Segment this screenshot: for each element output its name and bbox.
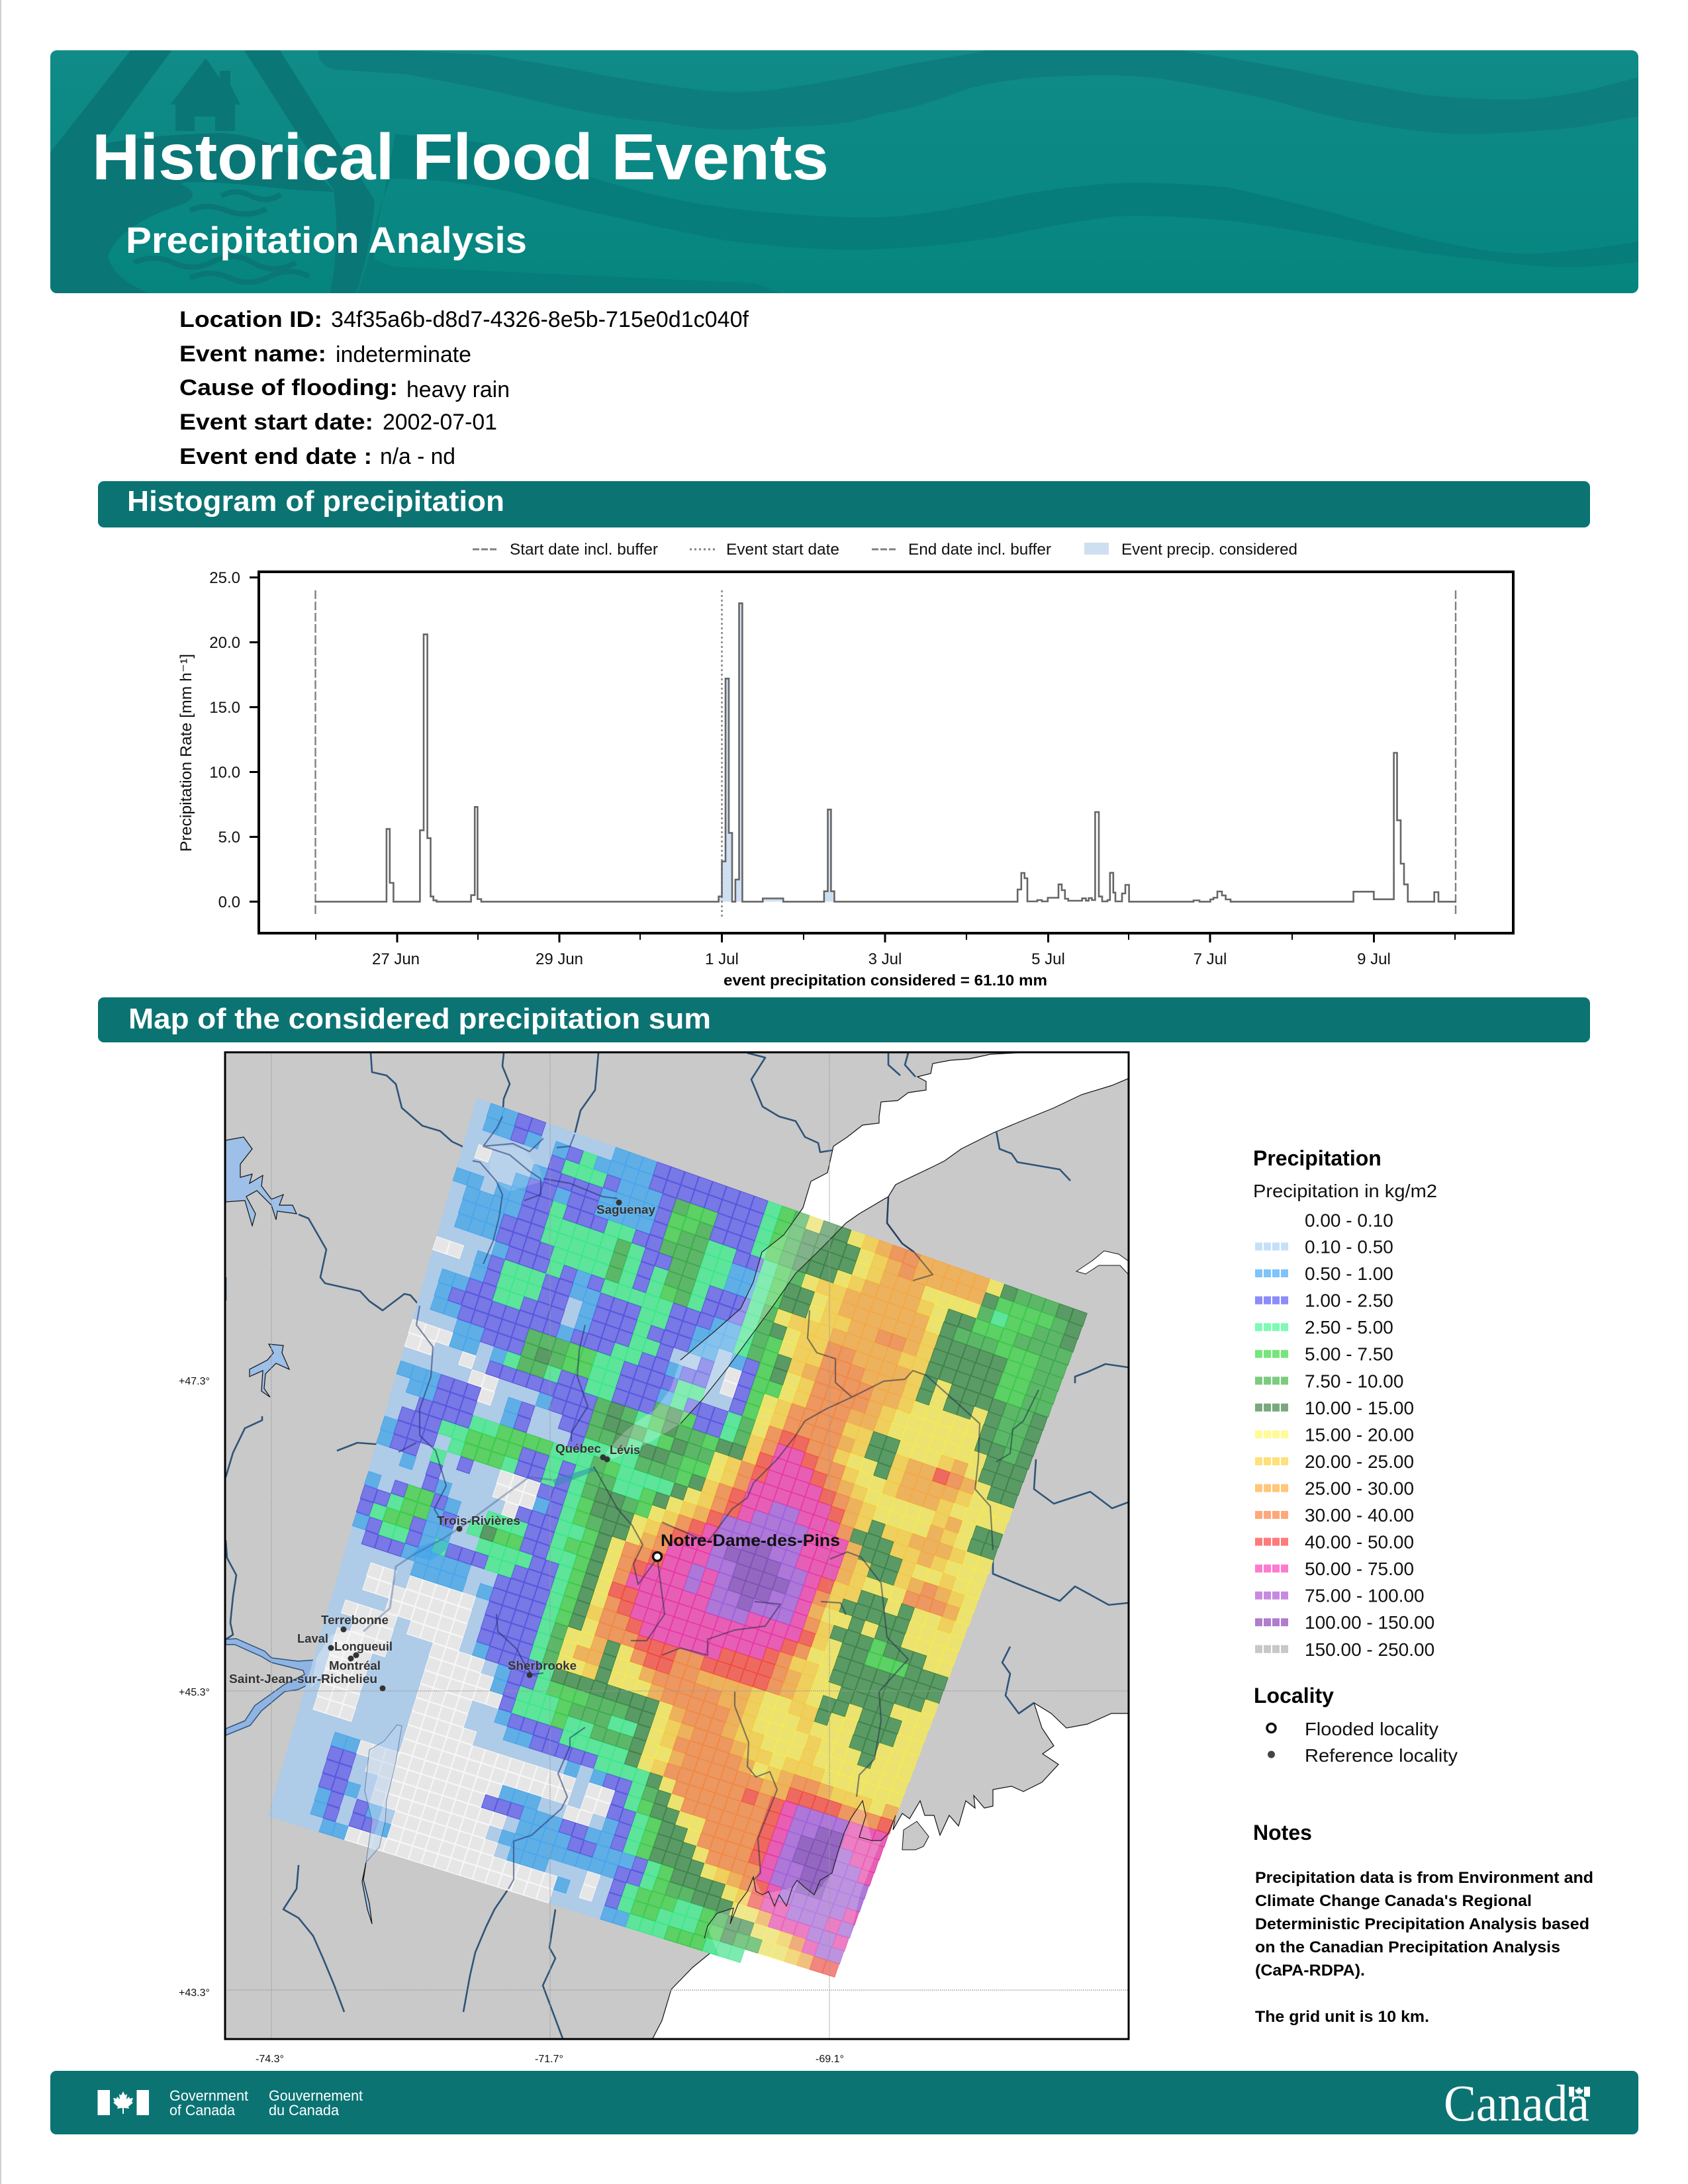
island (902, 1821, 929, 1850)
legend labels: 10.00 - 15.00 (1305, 1398, 1414, 1418)
chart legend: End date incl. buffer (908, 541, 1051, 559)
locality labels: Saguenay (596, 1203, 656, 1216)
chart frame and ticks (250, 572, 1513, 942)
event metadata block: Event name: (179, 341, 326, 367)
small lagoon (1076, 1251, 1128, 1274)
legend labels: 20.00 - 25.00 (1305, 1451, 1414, 1472)
legend labels: 25.00 - 30.00 (1305, 1479, 1414, 1498)
map coordinate labels: -69.1° (816, 2054, 844, 2065)
locality labels (229, 1199, 656, 1692)
locality labels: Terrebonne (321, 1613, 389, 1627)
sea (652, 1703, 1129, 2040)
legend labels: 15.00 - 20.00 (1305, 1424, 1414, 1445)
rivers over grid (363, 1116, 1039, 1938)
locality labels: Longueuil (334, 1639, 393, 1653)
x axis labels: 3 Jul (868, 950, 902, 968)
flooded locality marker: Notre-Dame-des-Pins (661, 1531, 840, 1550)
map coordinate labels: +43.3° (179, 1987, 210, 1999)
event precipitation total: event precipitation considered = 61.10 mm (724, 972, 1047, 989)
chart legend: Start date incl. buffer (510, 541, 658, 559)
map coordinate labels: -71.7° (535, 2054, 563, 2065)
chart legend (473, 541, 1297, 559)
event metadata block: Location ID: (179, 307, 322, 332)
x axis labels: 29 Jun (536, 950, 583, 968)
event precipitation fill (719, 604, 834, 901)
government wordmark: du Canada (269, 2102, 340, 2118)
y axis labels: 20.0 (209, 634, 240, 652)
legend labels: 2.50 - 5.00 (1305, 1317, 1393, 1338)
legend labels: 150.00 - 250.00 (1305, 1639, 1434, 1660)
water lightening over grid (311, 1145, 881, 1979)
y axis labels: 25.0 (209, 569, 240, 587)
x axis labels (372, 950, 1391, 968)
locality labels: Laval (297, 1631, 328, 1645)
precipitation legend: Precipitation (1253, 1146, 1382, 1170)
legend labels: 5.00 - 7.50 (1305, 1344, 1393, 1365)
section heading: histogram: Histogram of precipitation (127, 485, 504, 518)
x axis labels: 9 Jul (1357, 950, 1391, 968)
y axis labels: 0.0 (218, 893, 240, 911)
x axis labels: 5 Jul (1031, 950, 1065, 968)
lakes (226, 1137, 372, 1924)
icon: government flag (98, 2090, 149, 2115)
legend labels: 0.50 - 1.00 (1305, 1263, 1393, 1284)
locality legend (1254, 1684, 1458, 1766)
legend labels: 0.00 - 0.10 (1305, 1210, 1393, 1231)
event metadata block: heavy rain (406, 377, 510, 402)
chart legend: Event start date (726, 541, 839, 559)
legend labels: 0.10 - 0.50 (1305, 1236, 1393, 1257)
event metadata block: n/a - nd (380, 444, 455, 469)
Canada wordmark: Canada (1444, 2074, 1589, 2132)
y axis labels: 10.0 (209, 764, 240, 782)
notes (1253, 1821, 1593, 2026)
outer rivers (226, 1053, 1128, 2038)
section heading: map (98, 997, 1590, 1042)
locality labels: Saint-Jean-sur-Richelieu (229, 1672, 377, 1686)
map coordinate labels (179, 1376, 844, 2065)
government wordmark: of Canada (169, 2102, 236, 2118)
header decorative flood logo and waves (50, 46, 1648, 298)
precipitation legend (1253, 1146, 1437, 1660)
legend swatches (1255, 1247, 1289, 1649)
event metadata block (179, 307, 749, 469)
precipitation grid (267, 1098, 1088, 1978)
legend labels: 50.00 - 75.00 (1305, 1559, 1414, 1579)
channel near Quebec (552, 1467, 596, 1486)
event metadata block: Event start date: (179, 410, 373, 435)
footer bar (50, 2071, 1638, 2134)
notes: Precipitation data is from Environment and (1255, 1869, 1593, 1887)
buffer and event date lines (315, 590, 1456, 917)
y axis labels (209, 569, 240, 911)
government wordmark: Gouvernement (269, 2087, 363, 2104)
notes: Notes (1253, 1821, 1312, 1844)
chart legend: Event precip. considered (1121, 541, 1297, 559)
legend labels: 100.00 - 150.00 (1305, 1612, 1434, 1633)
estuary shoreline over grid (680, 1208, 846, 1424)
legend labels: 7.50 - 10.00 (1305, 1371, 1403, 1391)
jagged coast over grid (704, 1801, 896, 1938)
legend labels (1305, 1210, 1434, 1660)
header banner (50, 46, 1648, 298)
y axis labels: 5.0 (218, 829, 240, 846)
notes: The grid unit is 10 km. (1255, 2008, 1429, 2026)
event metadata block: 2002-07-01 (383, 410, 497, 435)
x axis labels: 1 Jul (705, 950, 739, 968)
locality labels: Trois-Rivières (437, 1514, 520, 1527)
graticule (225, 1052, 1129, 2039)
notes: Climate Change Canada's Regional (1255, 1892, 1532, 1910)
locality labels: Montréal (329, 1659, 381, 1672)
map panel (179, 1051, 1129, 2065)
map base water and rivers (226, 1051, 1129, 2040)
event metadata block: 34f35a6b-d8d7-4326-8e5b-715e0d1c040f (331, 307, 749, 332)
notes: Deterministic Precipitation Analysis based (1255, 1915, 1589, 1933)
y axis title: Precipitation Rate [mm h⁻¹] (177, 654, 195, 852)
government wordmark (169, 2087, 363, 2118)
locality legend: Reference locality (1305, 1745, 1458, 1766)
lake champlain over grid (365, 1725, 402, 1862)
precipitation legend: Precipitation in kg/m2 (1253, 1181, 1437, 1201)
map coordinate labels: +47.3° (179, 1376, 210, 1387)
notes: (CaPA-RDPA). (1255, 1962, 1365, 1979)
section heading: histogram (98, 481, 1590, 527)
event metadata block: Event end date : (179, 444, 372, 469)
precipitation step line (315, 604, 1456, 901)
lake saint pierre (412, 1539, 452, 1561)
y axis labels: 15.0 (209, 699, 240, 717)
notes: on the Canadian Precipitation Analysis (1255, 1938, 1560, 1956)
title: Historical Flood Events (92, 120, 829, 193)
locality labels: Québec (555, 1441, 601, 1455)
map land background (225, 1052, 1129, 2039)
section heading: map: Map of the considered precipitation sum (128, 1003, 711, 1035)
x axis labels: 27 Jun (372, 950, 420, 968)
locality legend: Flooded locality (1305, 1719, 1438, 1739)
subtitle: Precipitation Analysis (126, 219, 527, 261)
x axis labels: 7 Jul (1194, 950, 1227, 968)
locality labels: Lévis (610, 1443, 640, 1457)
legend labels: 40.00 - 50.00 (1305, 1532, 1414, 1553)
upstream St Lawrence (363, 1477, 552, 1631)
government wordmark: Government (169, 2087, 248, 2104)
event metadata block: Cause of flooding: (179, 375, 398, 400)
locality labels: Sherbrooke (508, 1659, 577, 1672)
legend labels: 30.00 - 40.00 (1305, 1505, 1414, 1525)
map frame (225, 1052, 1129, 2039)
estuary (662, 1051, 1129, 1424)
legend labels: 75.00 - 100.00 (1305, 1586, 1425, 1606)
histogram chart (177, 541, 1513, 989)
legend labels: 1.00 - 2.50 (1305, 1291, 1393, 1311)
flooded locality marker (653, 1531, 840, 1561)
event metadata block: indeterminate (336, 342, 471, 367)
map coordinate labels: -74.3° (256, 2054, 284, 2065)
locality legend: Locality (1254, 1684, 1334, 1707)
map coordinate labels: +45.3° (179, 1687, 210, 1698)
